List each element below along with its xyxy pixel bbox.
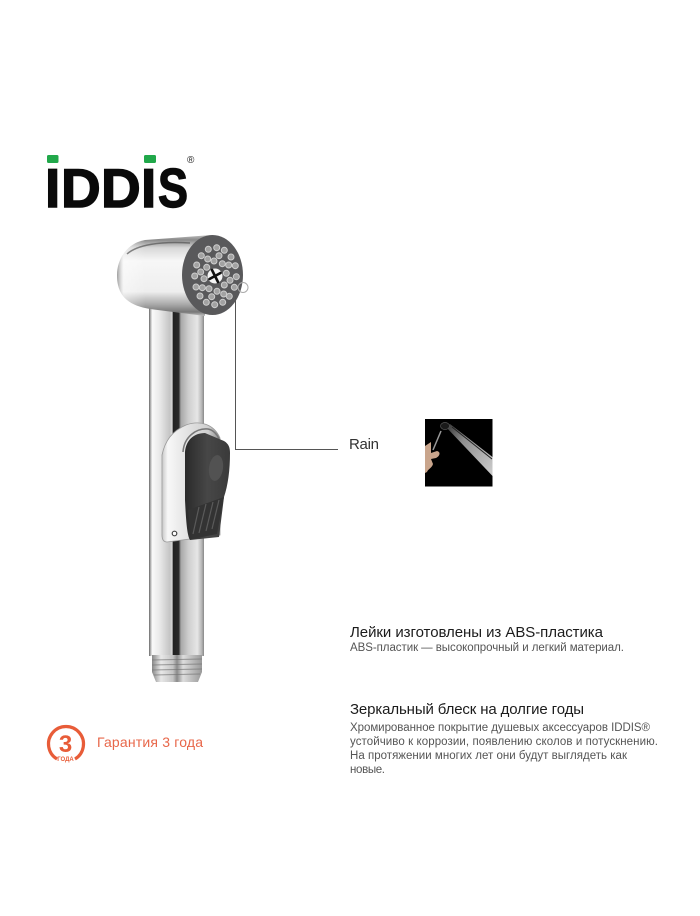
lever thumb dimple xyxy=(207,454,225,482)
shower head body xyxy=(117,235,212,316)
lever housing xyxy=(162,423,220,542)
description xyxy=(350,722,658,776)
nozzles xyxy=(192,245,239,308)
label: Rain: Rain xyxy=(349,436,379,453)
spray face xyxy=(182,235,243,315)
product: hand shower xyxy=(117,235,243,682)
housing screw xyxy=(172,531,177,536)
text block: mirror shine xyxy=(350,701,658,776)
description: устойчиво к коррозии, появлению сколов и потускнению. xyxy=(350,736,658,748)
callout line: Rain xyxy=(236,282,338,450)
description: На протяжении многих лет они будут выглядеть как xyxy=(350,750,628,762)
warranty badge xyxy=(48,726,203,763)
logo dots xyxy=(47,155,156,163)
ring with 3: ГОДА xyxy=(57,757,74,763)
description: новые. xyxy=(350,764,385,776)
description: Хромированное покрытие душевых аксессуаров IDDIS® xyxy=(350,722,651,734)
text block: ABS plastic xyxy=(350,624,624,654)
warranty text: Гарантия 3 года xyxy=(97,734,203,750)
logo: IDDIS xyxy=(45,155,195,219)
lever ribbed pad xyxy=(188,497,224,539)
logo wordmark: IDDI xyxy=(45,157,156,219)
ring with 3: 3 xyxy=(59,731,72,758)
trigger lever xyxy=(185,433,230,540)
logo wordmark: S xyxy=(158,157,188,219)
hand xyxy=(425,442,440,473)
threaded connector xyxy=(152,655,202,682)
small shower head xyxy=(440,422,450,430)
registered mark: ® xyxy=(187,155,195,166)
center screw xyxy=(208,268,222,284)
heading: Лейки изготовлены из ABS-пластика xyxy=(350,624,604,641)
description: ABS-пластик — высокопрочный и легкий материал. xyxy=(350,642,624,654)
photo: rain spray xyxy=(425,419,492,486)
ring with 3 xyxy=(48,726,84,763)
housing inner arch xyxy=(183,429,219,452)
heading: Зеркальный блеск на долгие годы xyxy=(350,701,584,718)
spray stream xyxy=(446,424,492,476)
shower stem xyxy=(149,308,204,656)
